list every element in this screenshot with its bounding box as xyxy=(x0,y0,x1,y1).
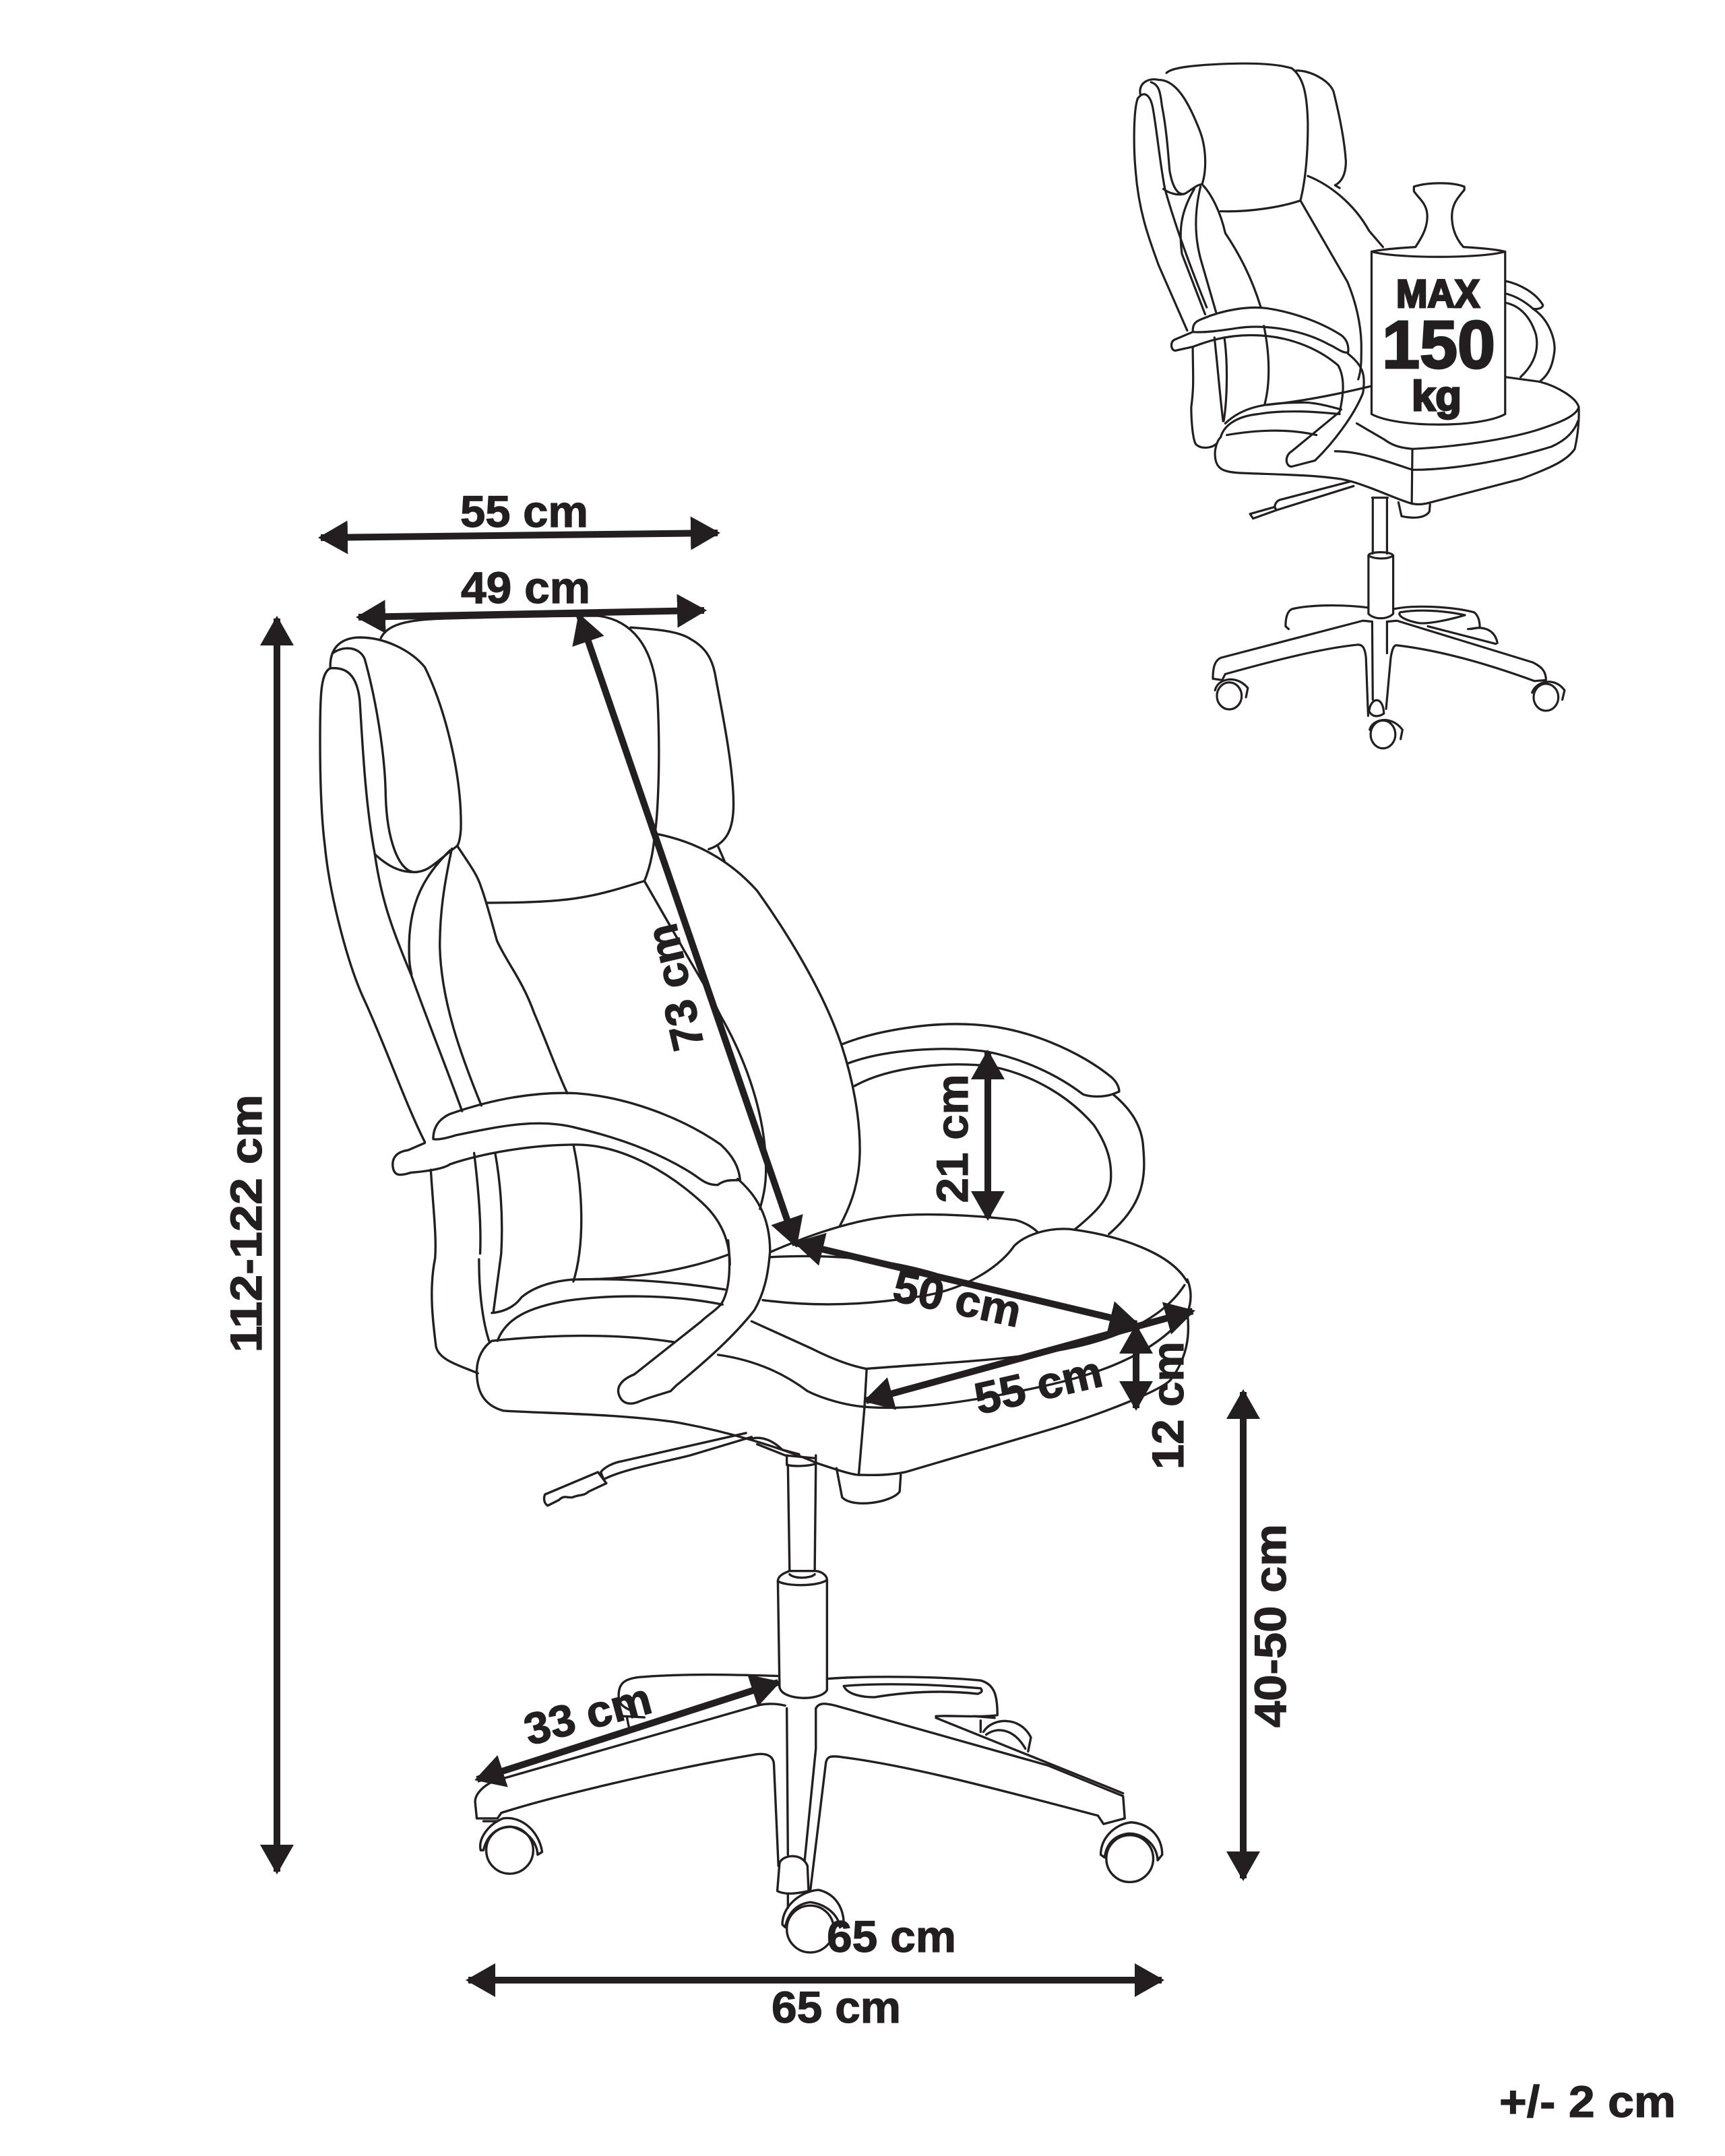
dimension: seat depth 50 cm xyxy=(796,1243,1137,1337)
small chair drawing xyxy=(1134,63,1579,749)
chair seat, gas lift and star base xyxy=(432,1179,1191,1953)
dimension: base depth label 65 cm: 65 cm xyxy=(827,1911,956,1961)
label: kg: kg xyxy=(1412,373,1462,420)
label: 150: 150 xyxy=(1382,307,1495,383)
main chair line drawing xyxy=(320,616,1191,1953)
dimension: headrest width 49 cm xyxy=(358,563,704,617)
tolerance note: +/- 2 cm xyxy=(1499,2076,1676,2126)
dimension: seat width 55 cm xyxy=(866,1311,1193,1424)
icon: max load weight xyxy=(1371,183,1505,424)
chair backrest and upper seat xyxy=(320,616,1144,1312)
small chair with weight capacity xyxy=(1134,63,1579,749)
dimension: backrest height 73 cm xyxy=(579,616,796,1245)
dimension: overall width 55 cm xyxy=(321,486,718,538)
dimension: seat height 40-50 cm: 40-50 cm xyxy=(1245,1524,1295,1727)
dimension: base width 65 cm: 65 cm xyxy=(772,1982,901,2032)
dimension: headrest width 49 cm: 49 cm xyxy=(461,563,590,612)
dimension: base radius 33 cm xyxy=(477,1673,778,1779)
dimension: base radius 33 cm: 33 cm xyxy=(519,1673,656,1754)
dimension: total height 112-122 cm: 112-122 cm xyxy=(221,1094,271,1353)
dimension: seat width 55 cm: 55 cm xyxy=(970,1346,1107,1424)
label: MAX: MAX xyxy=(1396,272,1480,316)
dimension: seat thickness 12 cm: 12 cm xyxy=(1143,1341,1193,1469)
dimension: overall width 55 cm: 55 cm xyxy=(460,486,588,536)
dimension: seat depth 50 cm: 50 cm xyxy=(889,1261,1026,1337)
dimension: armrest height 21 cm: 21 cm xyxy=(927,1074,977,1203)
dimension: backrest height 73 cm: 73 cm xyxy=(636,919,714,1055)
